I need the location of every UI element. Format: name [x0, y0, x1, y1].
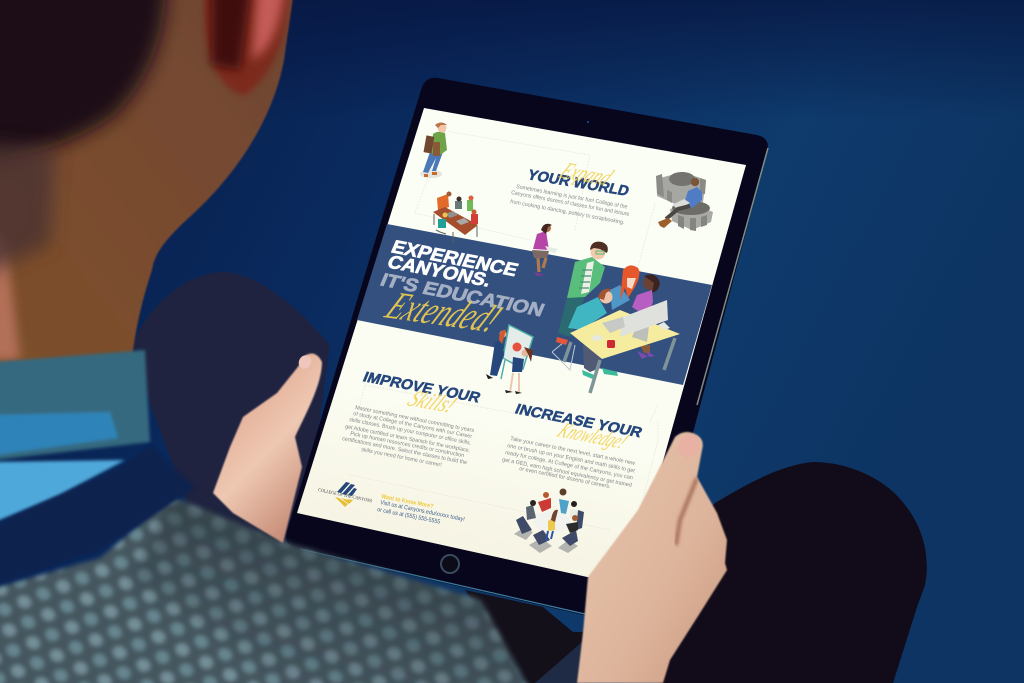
- CANYONS.: CANYONS.: [384, 251, 495, 291]
- paragraph: improve: skills classes. Brush up your computer or office skills,: [349, 417, 472, 447]
- finger crease: [676, 478, 697, 545]
- red haired woman: [610, 265, 639, 310]
- EXPERIENCE: EXPERIENCE: [388, 236, 521, 280]
- section: increase your knowledge: [502, 402, 645, 490]
- neck and face: [0, 0, 294, 372]
- green shirt man: [556, 242, 608, 345]
- paragraph: improve: get Adobe certified or learn Spanish for the workplace.: [345, 424, 471, 454]
- logo wordmark: COLLEGE OF THE CANYONS: [318, 488, 373, 504]
- left knee: [130, 272, 330, 560]
- reader: left hand: [213, 354, 322, 543]
- paragraph: increase: Take your career to the next level, start a whole new: [510, 436, 636, 467]
- paragraph: improve: Pick up human resources credits or construction: [350, 431, 465, 459]
- ear: [204, 0, 290, 95]
- right knee: [660, 462, 927, 683]
- tablet bottom edge highlight: [300, 549, 585, 614]
- hairline fade: [0, 140, 55, 280]
- pants under desk: [583, 345, 602, 372]
- IT'S EDUCATION: IT'S EDUCATION: [377, 269, 548, 320]
- figure: man on gears: [656, 172, 713, 231]
- tablet: [286, 78, 768, 626]
- paragraph: increase: ready for college. At College of the Canyons, you can: [505, 450, 633, 481]
- side keyboard: [658, 322, 670, 330]
- figure: presenters at a chart: [486, 325, 533, 394]
- blue banner: [357, 224, 712, 385]
- home button: [441, 555, 459, 573]
- paragraph: Expand your world: Canyons offers dozens of classes for fun and leisure: [511, 190, 630, 218]
- figure: group around a table: [433, 192, 478, 243]
- tablet right edge highlight: [697, 148, 768, 405]
- paragraph: Expand your world: from cooking to dancing, pottery to scrapbooking.: [510, 199, 625, 226]
- keyboard: [602, 317, 625, 333]
- paragraph: increase: [502, 436, 636, 490]
- heading: INCREASE YOUR: INCREASE YOUR: [512, 402, 645, 441]
- computer monitor: [620, 300, 668, 337]
- reader: right hand: [577, 431, 727, 683]
- top carpet shade: [0, 0, 1024, 120]
- sweater body: [0, 497, 530, 683]
- dotted guide lines: [350, 131, 658, 530]
- pink neck side: [0, 225, 20, 360]
- Expand script: Expand: [554, 159, 618, 191]
- paragraph: increase: get a GED, earn high school equivalency or get trained: [502, 457, 632, 489]
- collar highlight: [0, 412, 118, 455]
- Want to know more: Want to Know More?: [381, 494, 434, 510]
- paragraph: increase: one or brush up on your English and math skills to get: [507, 443, 636, 475]
- figure: woman with tablet: [532, 224, 558, 276]
- lower gear: [670, 201, 713, 231]
- reader: shirt collar: [0, 350, 150, 522]
- heading: Expand Your World: [525, 159, 631, 200]
- sweater shade: [130, 497, 530, 683]
- paragraph: increase: or even certified for dozens of careers.: [519, 466, 611, 490]
- heading: IMPROVE YOUR: IMPROVE YOUR: [360, 370, 483, 406]
- paragraph: improve: Master something new without committing to years: [355, 405, 475, 434]
- figure: round table group: [514, 488, 584, 553]
- teal hoodie man: [568, 289, 612, 330]
- purple woman: [632, 275, 660, 359]
- desk legs: [564, 338, 675, 393]
- hair: [0, 0, 166, 165]
- footer call to action: [377, 494, 465, 526]
- main headline: [377, 236, 548, 341]
- stool: [552, 343, 575, 370]
- computer stand: [632, 318, 650, 342]
- figure: desk team: [552, 242, 680, 393]
- left thumbnail: [296, 353, 314, 371]
- phone line: or call us at (555) 555-5555: [377, 507, 441, 526]
- mug: [607, 340, 615, 348]
- logo: College of the Canyons: [318, 482, 373, 507]
- visit line: Visit us at Canyons.edu/xxxxx today!: [380, 500, 465, 523]
- paragraph: improve: of study at College of the Canyons with our Career: [353, 411, 473, 440]
- logo mark: [335, 482, 357, 507]
- dark shadow under tablet: [465, 590, 583, 683]
- collar band: [0, 350, 150, 460]
- paragraph: Expand your world: [510, 184, 630, 226]
- script: Knowledge!: Knowledge!: [552, 418, 633, 453]
- navy trouser fold: [535, 642, 582, 683]
- sweater collar: [0, 445, 195, 585]
- script: Skills!: Skills!: [402, 387, 462, 418]
- reader: sweater: [0, 445, 530, 683]
- YOUR WORLD: YOUR WORLD: [525, 168, 631, 200]
- screen: [297, 108, 746, 586]
- tablet body: [286, 78, 768, 626]
- camera: [587, 121, 589, 123]
- paragraph: improve: [342, 405, 475, 469]
- yellow desk: [570, 310, 680, 359]
- thumbnail: [675, 431, 703, 461]
- figure: student with books: [420, 122, 447, 178]
- reader: head and neck: [0, 0, 294, 372]
- section: improve your skills: [342, 370, 483, 469]
- shirt under collar: [0, 460, 125, 522]
- paragraph: Expand your world: Sometimes learning is just for fun! College of the: [516, 184, 628, 211]
- Extended! script: Extended!: [377, 285, 510, 341]
- paragraph: improve: skills you need for home or career!: [361, 447, 443, 469]
- upper gear: [656, 172, 706, 207]
- man in blue jacket: [658, 178, 702, 228]
- hand shape: [577, 432, 727, 683]
- shoes: [582, 368, 618, 380]
- paragraph: improve: certifications and more. Select the classes to build the: [342, 436, 467, 466]
- mouse: [592, 335, 602, 341]
